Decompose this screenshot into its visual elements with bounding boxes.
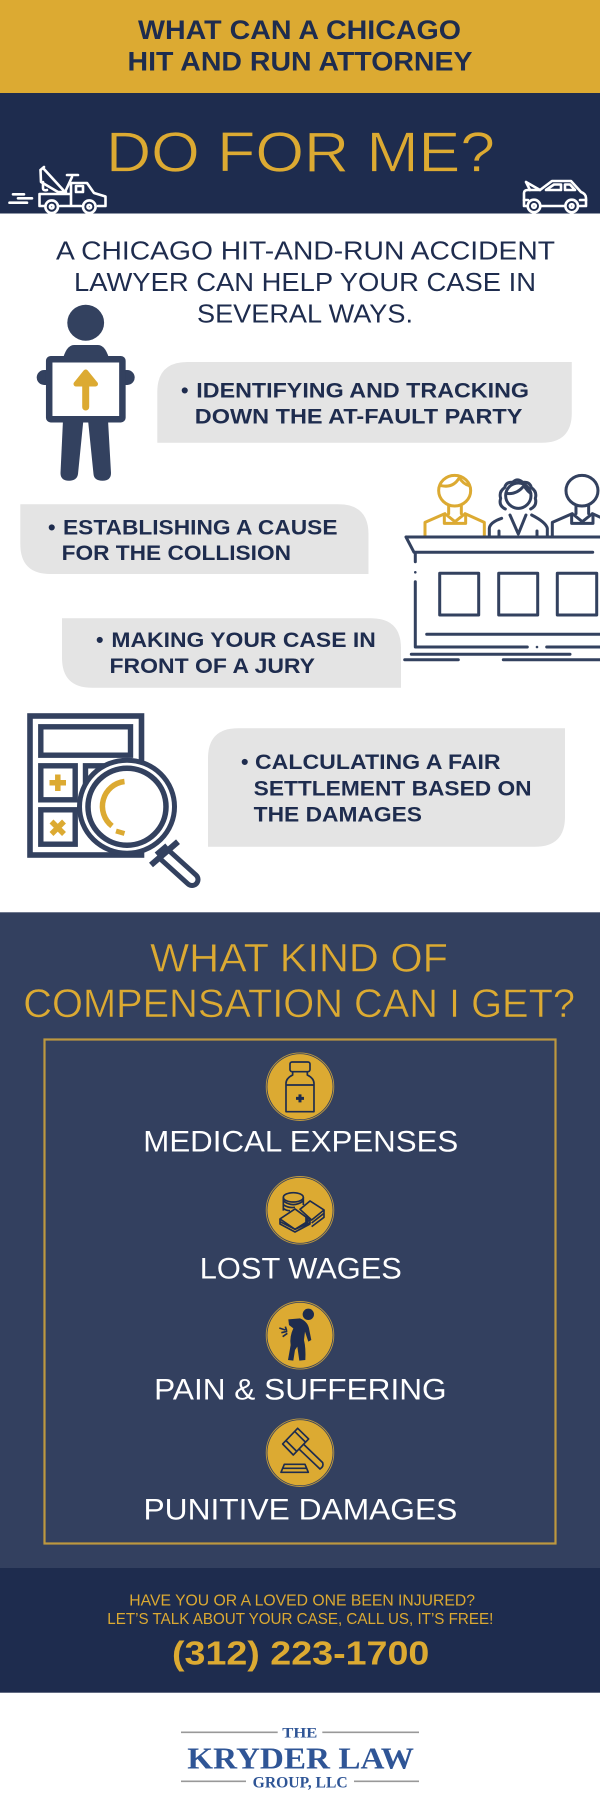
icon: calculator with magnifying glass: [30, 716, 192, 880]
panel: making your case: FRONT OF A JURY: [110, 654, 315, 678]
intro text: [56, 238, 555, 329]
panel: establishing a cause: [20, 504, 369, 574]
footer call to action: LET’S TALK ABOUT YOUR CASE, CALL US, IT’S FREE!: [107, 1611, 493, 1628]
panel: calculating a settlement: THE DAMAGES: [254, 803, 422, 827]
panel: identifying the at-fault party: [157, 362, 572, 443]
header band: gold title: WHAT CAN A CHICAGO: [138, 15, 461, 45]
header band: gold title: HIT AND RUN ATTORNEY: [128, 47, 473, 77]
logo: The Kryder Law Group, LLC: THE: [282, 1726, 317, 1742]
compensation heading: WHAT KIND OF: [150, 936, 448, 980]
juror: man: [552, 475, 600, 536]
panel: calculating a settlement: CALCULATING A FAIR: [255, 750, 501, 774]
header band: gold title: [0, 0, 600, 93]
panel: identifying the at-fault party: IDENTIFYING AND TRACKING: [196, 379, 529, 403]
panel: calculating a settlement: SETTLEMENT BASED ON: [254, 777, 532, 801]
item: punitive damages: [144, 1419, 457, 1527]
intro text: LAWYER CAN HELP YOUR CASE IN: [74, 269, 536, 297]
panel: making your case: MAKING YOUR CASE IN: [111, 628, 376, 652]
item: medical expenses: [143, 1053, 458, 1159]
compensation heading: COMPENSATION CAN I GET?: [23, 982, 575, 1026]
panel: identifying the at-fault party: •: [181, 379, 188, 403]
item: pain and suffering: PAIN & SUFFERING: [154, 1374, 447, 1407]
header band: navy heading with vehicles: DO FOR ME?: [106, 121, 495, 185]
compensation frame: [44, 1040, 556, 1544]
logo: The Kryder Law Group, LLC: [181, 1726, 419, 1792]
item: lost wages: LOST WAGES: [200, 1252, 402, 1285]
panel: establishing a cause: •: [48, 515, 56, 539]
panel: calculating a settlement: •: [241, 750, 248, 774]
item: lost wages: [200, 1176, 402, 1285]
intro text: SEVERAL WAYS.: [197, 301, 413, 329]
panel: making your case: [62, 618, 401, 688]
logo: The Kryder Law Group, LLC: GROUP, LLC: [253, 1775, 348, 1792]
compensation heading: [23, 936, 575, 1026]
panel: establishing a cause: FOR THE COLLISION: [62, 541, 291, 565]
panel: calculating a settlement: [208, 728, 565, 847]
panel: making your case: •: [96, 628, 104, 652]
item: medical expenses: MEDICAL EXPENSES: [143, 1126, 458, 1159]
icon: tow truck: [10, 167, 106, 213]
icon: car with raised hood: [524, 181, 586, 212]
icon: jury box: [405, 475, 600, 660]
footer call to action: HAVE YOU OR A LOVED ONE BEEN INJURED?: [129, 1592, 475, 1609]
header band: navy heading with vehicles: [0, 93, 600, 214]
panel: identifying the at-fault party: DOWN THE AT-FAULT PARTY: [195, 405, 522, 429]
juror: woman: [489, 480, 547, 536]
phone number: (312) 223-1700: [172, 1635, 429, 1672]
footer call to action: [0, 1568, 600, 1693]
section: compensation: [0, 912, 600, 1568]
intro text: A CHICAGO HIT-AND-RUN ACCIDENT: [56, 238, 555, 266]
juror: gold man: [425, 475, 484, 536]
item: pain and suffering: [154, 1302, 447, 1407]
item: punitive damages: PUNITIVE DAMAGES: [144, 1494, 457, 1527]
logo: The Kryder Law Group, LLC: KRYDER LAW: [187, 1740, 414, 1775]
icon: person holding sign with arrow: [37, 305, 135, 481]
panel: establishing a cause: ESTABLISHING A CAUSE: [63, 515, 338, 539]
